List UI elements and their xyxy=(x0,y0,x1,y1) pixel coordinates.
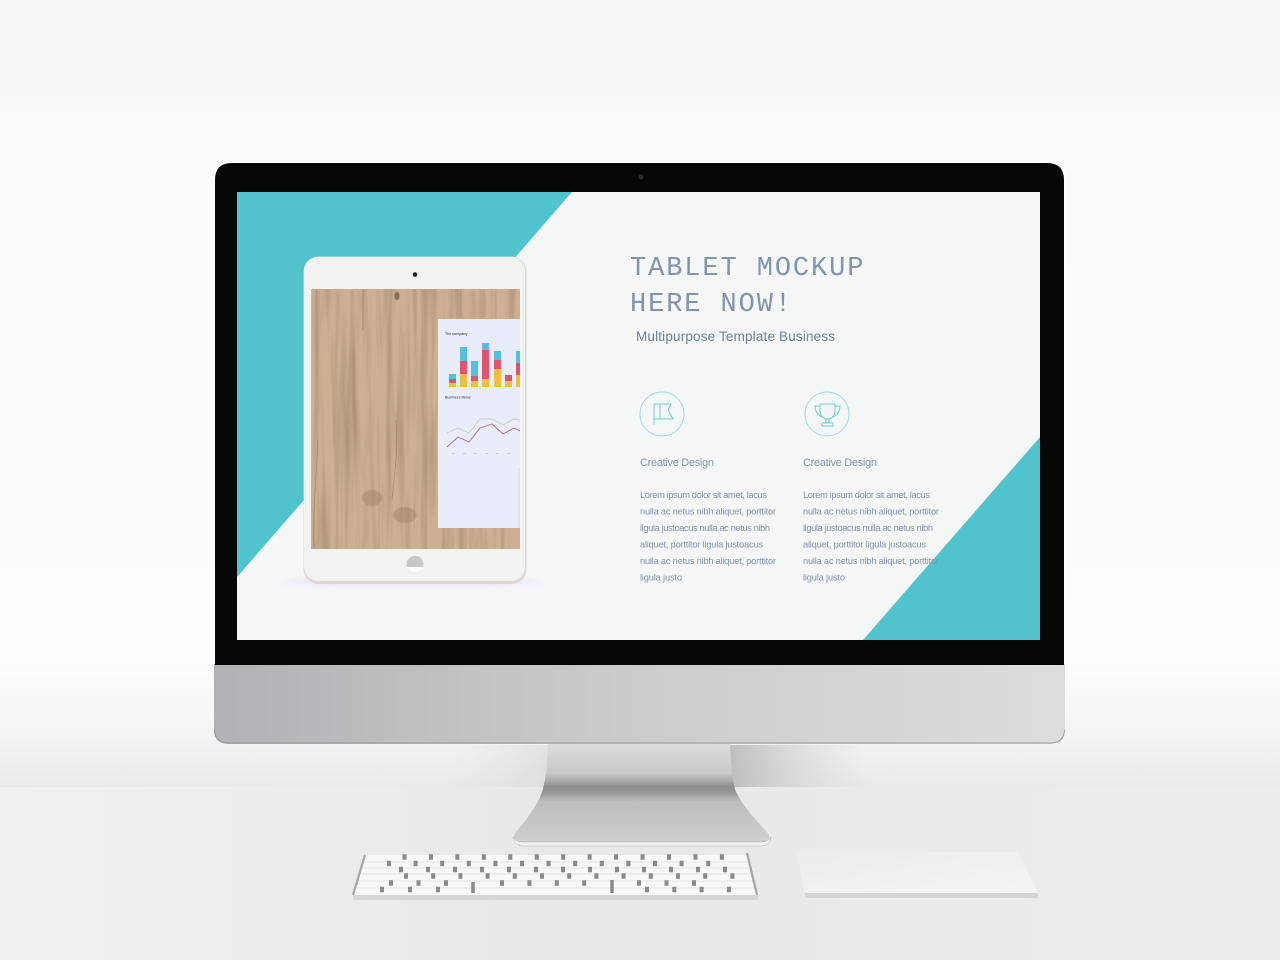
feature one text: nulla ac netus nibh aliquet, porttitor xyxy=(640,506,776,516)
stacked bar chart xyxy=(449,343,520,387)
monitor webcam xyxy=(638,174,644,180)
tablet camera xyxy=(413,272,417,277)
trackpad xyxy=(797,852,1038,898)
keyboard key gaps xyxy=(380,857,737,893)
feature two text: ligula justo xyxy=(803,572,845,582)
feature two text: aliquet, porttitor ligula justoacus xyxy=(803,540,926,550)
desk surface xyxy=(0,787,1280,960)
tablet home button xyxy=(406,555,424,572)
monitor chin xyxy=(214,664,1065,744)
feature two text: nulla ac netus nibh aliquet, porttitor xyxy=(803,556,939,566)
line chart xyxy=(447,419,520,454)
feature one text: nulla ac netus nibh aliquet, porttitor xyxy=(640,556,776,566)
tablet shadow xyxy=(280,576,544,588)
tablet wood photo xyxy=(311,289,520,549)
feature one text xyxy=(640,490,776,582)
teal corner bottom right xyxy=(863,437,1040,640)
feature two heading: Creative Design xyxy=(803,457,877,469)
title line two: HERE NOW! xyxy=(630,290,793,320)
icon: flag xyxy=(640,392,684,436)
keyboard xyxy=(353,853,758,900)
teal corner top left xyxy=(237,192,572,577)
feature one heading: Creative Design xyxy=(640,457,714,469)
monitor bezel xyxy=(215,163,1064,665)
chart title one: The company xyxy=(445,332,468,336)
feature one text: ligula justoacus nulla ac netus nibh xyxy=(640,523,770,533)
subtitle: Multipurpose Template Business xyxy=(636,329,835,344)
monitor xyxy=(214,162,1065,744)
feature two text: nulla ac netus nibh aliquet, porttitor xyxy=(803,506,939,516)
feature two text xyxy=(803,490,939,582)
paper with charts xyxy=(438,319,520,528)
feature one text: aliquet, porttitor ligula justoacus xyxy=(640,540,763,550)
monitor stand xyxy=(513,744,771,846)
slide screen xyxy=(237,192,1040,640)
feature one text: ligula justo xyxy=(640,572,682,582)
monitor outline glow xyxy=(214,162,1065,665)
feature one text: Lorem ipsum dolor sit amet, lacus xyxy=(640,490,767,500)
tablet body xyxy=(304,256,526,584)
title: TABLET MOCKUP xyxy=(630,254,865,284)
stand shadow on wall xyxy=(450,745,868,787)
feature two text: ligula justoacus nulla ac netus nibh xyxy=(803,523,933,533)
icon: trophy xyxy=(805,392,849,436)
chart title two: Business Items xyxy=(445,396,471,400)
feature two text: Lorem ipsum dolor sit amet, lacus xyxy=(803,490,930,500)
tablet xyxy=(304,256,526,584)
